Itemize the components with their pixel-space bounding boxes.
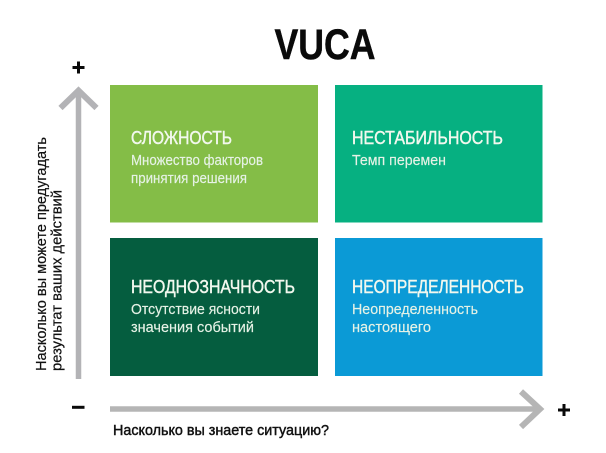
title: VUCA	[274, 21, 376, 69]
panel: complexity: СЛОЖНОСТЬ	[131, 127, 232, 148]
vertical axis label	[34, 137, 66, 371]
vertical axis label: результат ваших действий	[50, 190, 66, 371]
panel: complexity	[110, 85, 318, 222]
icon: plus top	[72, 62, 84, 74]
panel: uncertainty	[335, 238, 542, 376]
panel: ambiguity: значения событий	[131, 320, 254, 336]
panel: complexity: Множество факторов	[131, 153, 263, 169]
icon: plus right	[558, 404, 570, 416]
panel: volatility	[335, 85, 542, 222]
panel: ambiguity: Отсутствие ясности	[131, 302, 260, 318]
panel: volatility: Темп перемен	[352, 153, 446, 169]
arrow: vertical axis	[60, 90, 96, 379]
icon: minus	[72, 406, 84, 409]
panel: complexity: принятия решения	[131, 171, 247, 187]
panel: ambiguity: НЕОДНОЗНАЧНОСТЬ	[131, 276, 295, 297]
arrow: horizontal axis	[110, 392, 540, 427]
panel: uncertainty: Неопределенность	[352, 302, 478, 318]
vertical axis label: Насколько вы можете предугадать	[34, 137, 50, 371]
horizontal axis label: Насколько вы знаете ситуацию?	[113, 423, 329, 439]
panel: uncertainty: настоящего	[352, 320, 431, 336]
panel: ambiguity	[110, 238, 318, 376]
panel: volatility: НЕСТАБИЛЬНОСТЬ	[352, 127, 503, 148]
panel: uncertainty: НЕОПРЕДЕЛЕННОСТЬ	[352, 276, 524, 297]
